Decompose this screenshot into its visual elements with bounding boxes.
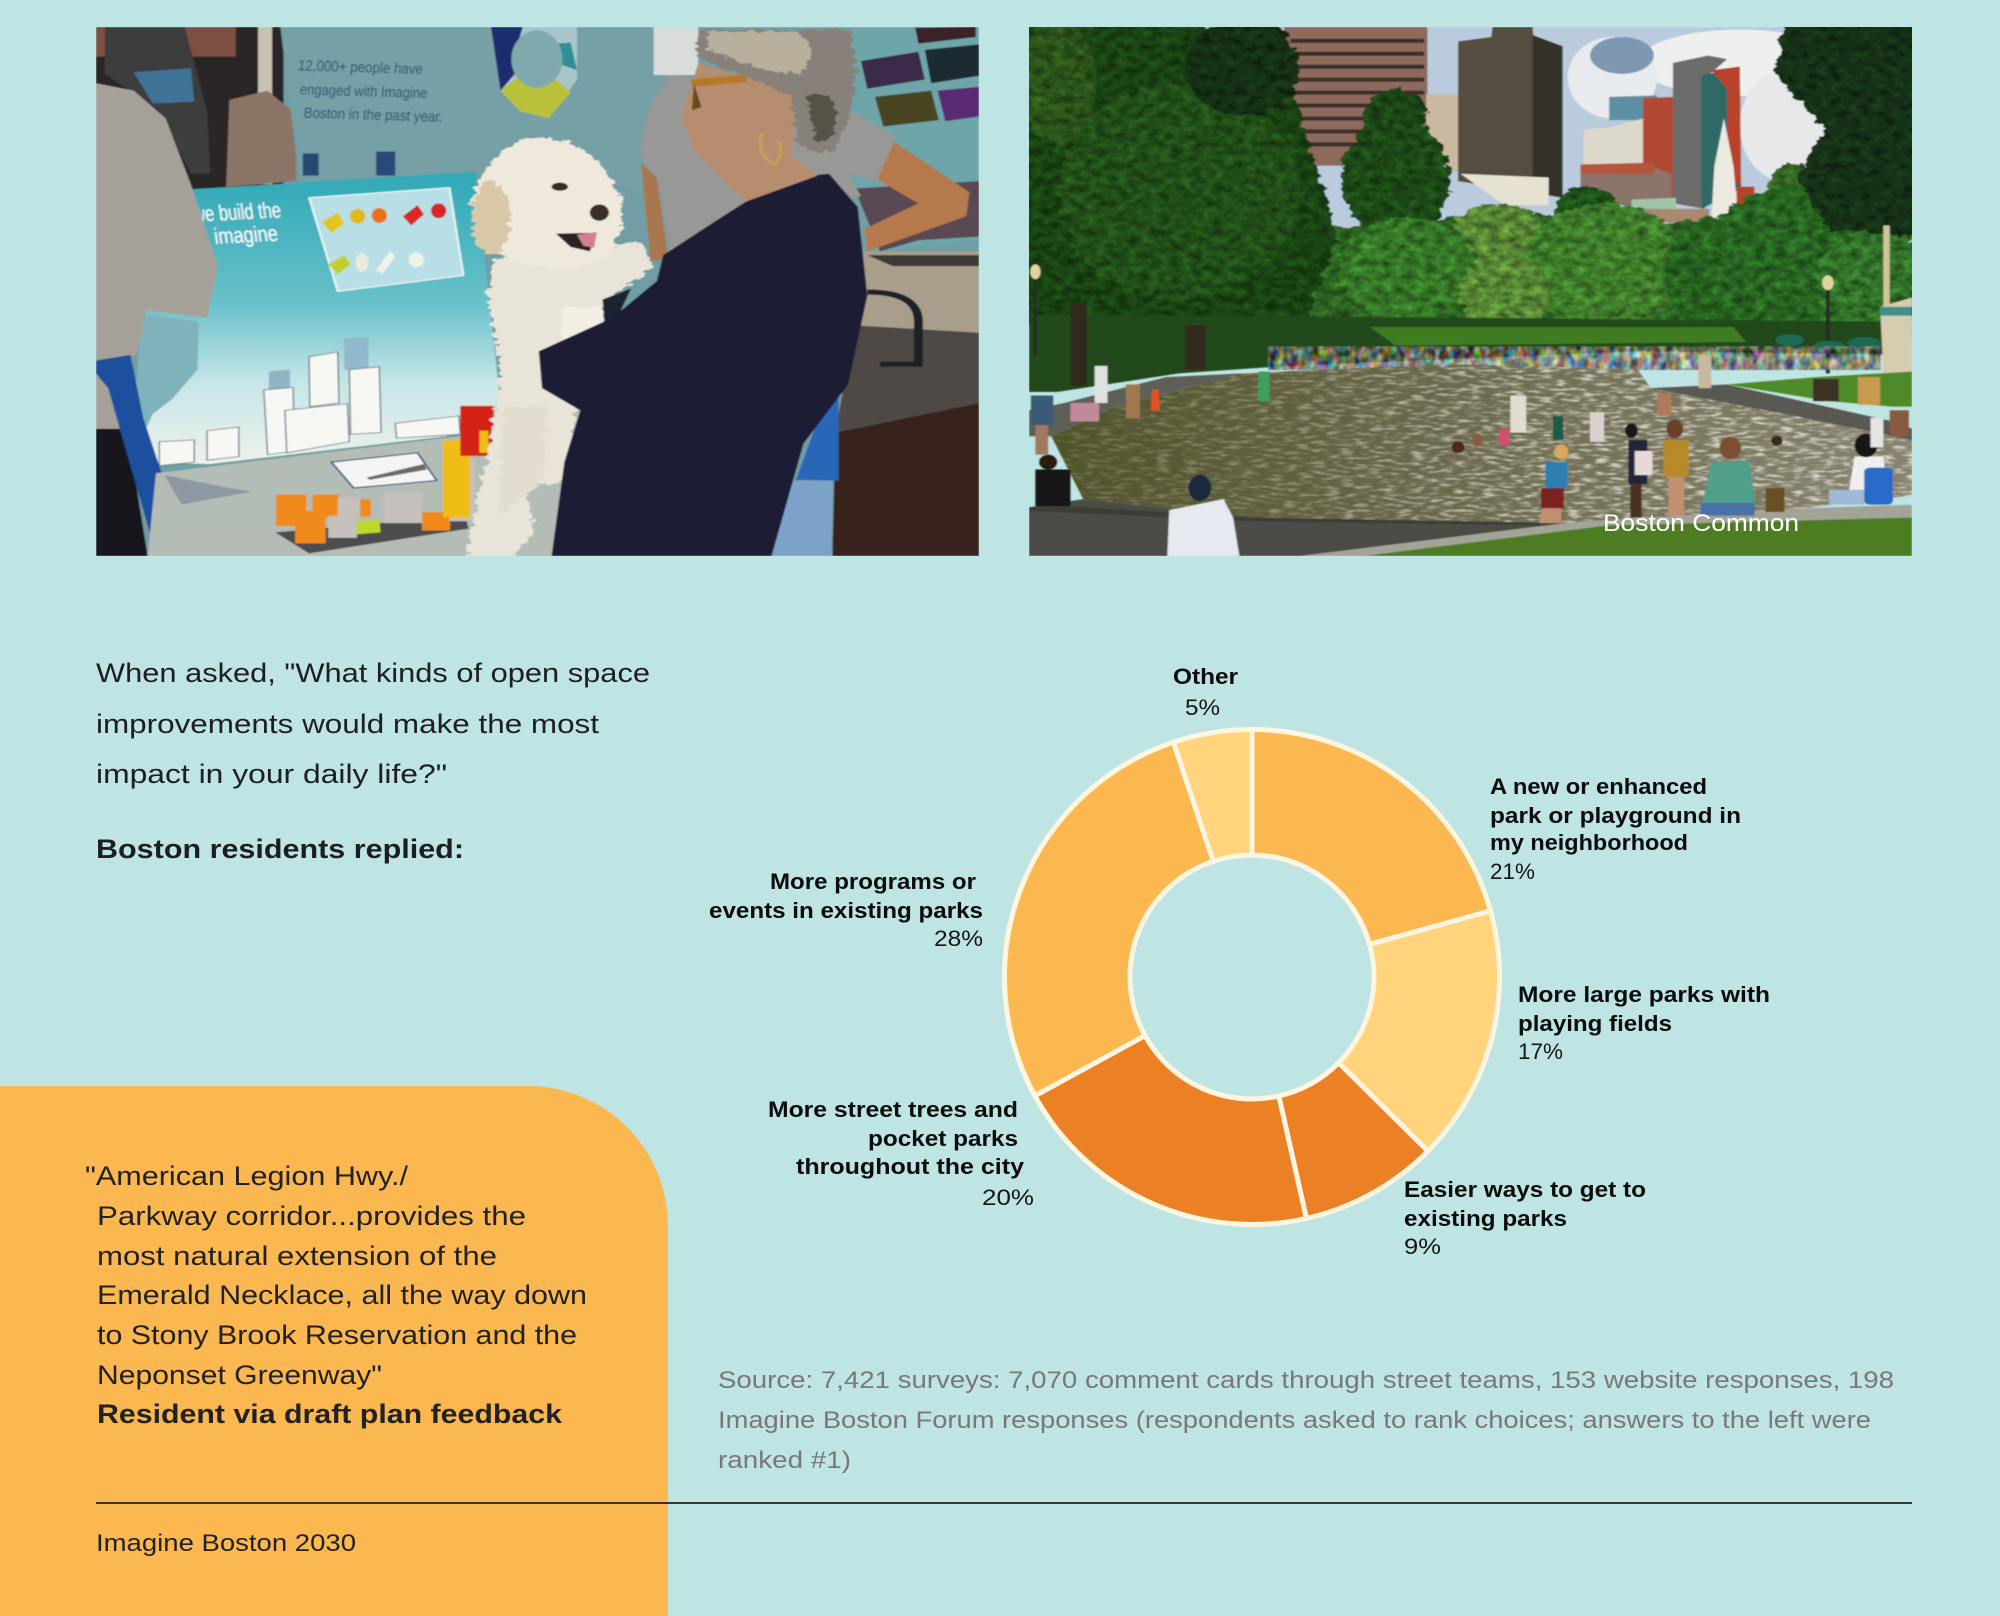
survey question text: Boston residents replied: xyxy=(96,834,464,864)
woman in navy sweater xyxy=(539,30,867,556)
quote text: "American Legion Hwy./ xyxy=(85,1161,409,1191)
slice: street trees 20% xyxy=(1035,1036,1306,1224)
survey question text xyxy=(96,658,650,864)
quote text: Neponset Greenway" xyxy=(97,1360,382,1390)
slice: other 5% xyxy=(1174,730,1252,861)
large dark trees xyxy=(1013,18,1925,329)
label: street trees: pocket parks xyxy=(868,1126,1018,1151)
label: programs: 28% xyxy=(934,926,983,951)
van and brick background xyxy=(96,27,296,192)
survey question text: improvements would make the most xyxy=(96,709,600,739)
poster behind: engaged with Imagine xyxy=(299,82,428,102)
label: programs: events in existing parks xyxy=(709,898,983,923)
label: programs xyxy=(709,869,983,951)
label: easier ways: Easier ways to get to xyxy=(1404,1177,1646,1202)
survey question text: impact in your daily life?" xyxy=(96,759,447,789)
people at the pond xyxy=(1031,355,1909,556)
midground trees xyxy=(1306,89,1931,340)
source note: ranked #1) xyxy=(718,1447,851,1474)
label: large parks: More large parks with xyxy=(1518,982,1770,1007)
quote text: Parkway corridor...provides the xyxy=(97,1201,526,1231)
label: large parks xyxy=(1518,982,1770,1064)
poster behind: Boston in the past year. xyxy=(303,105,443,125)
photo caption: Boston Common xyxy=(1603,510,1799,537)
label: other xyxy=(1173,664,1238,720)
poster behind: 12,000+ people have xyxy=(297,58,424,78)
label: large parks: 17% xyxy=(1518,1039,1563,1064)
foreground pavement and grass xyxy=(1029,499,1912,556)
table with clipboard and building blocks xyxy=(148,403,587,556)
pond water xyxy=(1029,362,1912,525)
label: large parks: playing fields xyxy=(1518,1011,1672,1036)
panel: resident quote xyxy=(0,1086,668,1616)
poster behind xyxy=(280,27,663,200)
label: new or enhanced park: 21% xyxy=(1490,859,1535,884)
blue tote and jeans xyxy=(768,388,839,556)
quote text: Resident via draft plan feedback xyxy=(97,1399,562,1429)
right poster xyxy=(851,27,979,251)
lawn under the trees xyxy=(1029,226,1912,392)
photo: Boston Common frog pond xyxy=(1029,27,1912,556)
label: easier ways: existing parks xyxy=(1404,1206,1567,1231)
dog xyxy=(465,138,654,558)
teal display board xyxy=(130,172,500,466)
label: new or enhanced park xyxy=(1490,774,1741,884)
left pavement xyxy=(1029,373,1243,436)
slice: programs 28% xyxy=(1005,742,1213,1096)
pavement on the right xyxy=(1651,372,1912,442)
sky xyxy=(1029,27,1912,249)
quote text: Emerald Necklace, all the way down xyxy=(97,1280,587,1310)
source note xyxy=(718,1367,1894,1474)
photo: resident with dog at Imagine Boston display xyxy=(96,27,979,556)
label: street trees: throughout the city xyxy=(796,1154,1025,1179)
label: new or enhanced park: A new or enhanced xyxy=(1490,774,1707,799)
donut chart xyxy=(1005,730,1499,1224)
quote text: most natural extension of the xyxy=(97,1241,497,1271)
crowd band xyxy=(1268,347,1880,370)
slice: easier ways 9% xyxy=(1279,1063,1428,1218)
skyline buildings xyxy=(1284,27,1755,224)
survey question text: When asked, "What kinds of open space xyxy=(96,658,650,688)
teal display board: imagine xyxy=(212,221,280,249)
source note: Source: 7,421 surveys: 7,070 comment cards through street teams, 153 website responses, 198 xyxy=(718,1367,1894,1394)
label: street trees: 20% xyxy=(982,1185,1034,1210)
label: street trees xyxy=(768,1097,1034,1210)
label: other: Other xyxy=(1173,664,1238,689)
label: programs: More programs or xyxy=(770,869,976,894)
teal display board: we build the xyxy=(191,198,283,227)
label: easier ways: 9% xyxy=(1404,1234,1441,1259)
label: other: 5% xyxy=(1185,695,1220,720)
label: street trees: More street trees and xyxy=(768,1097,1018,1122)
label: new or enhanced park: my neighborhood xyxy=(1490,830,1688,855)
man in grey shirt xyxy=(640,27,969,261)
left person in grey sweater xyxy=(96,83,218,556)
label: easier ways xyxy=(1404,1177,1646,1259)
slice: large parks 17% xyxy=(1339,911,1499,1151)
footer credit: Imagine Boston 2030 xyxy=(96,1530,356,1557)
concrete ledge and brick wall xyxy=(832,251,979,556)
quote text: to Stony Brook Reservation and the xyxy=(97,1320,577,1350)
quote text xyxy=(85,1161,587,1429)
label: new or enhanced park: park or playground in xyxy=(1490,803,1741,828)
slice: new or enhanced park 21% xyxy=(1252,730,1490,944)
source note: Imagine Boston Forum responses (respondents asked to rank choices; answers to the left were xyxy=(718,1407,1871,1434)
